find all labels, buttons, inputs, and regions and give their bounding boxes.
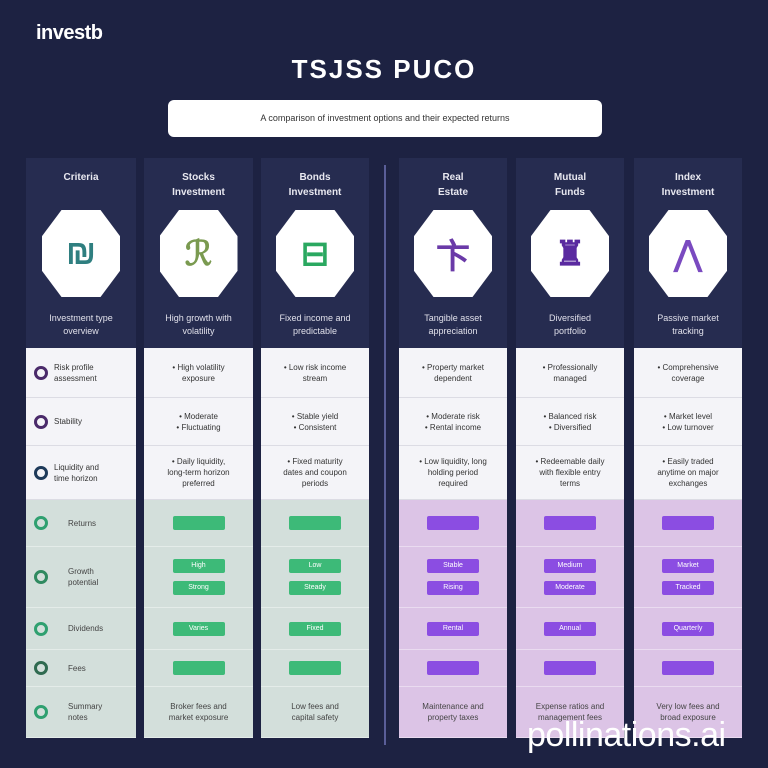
panel: column 5: Annual	[559, 624, 581, 632]
panel: column 4: Tangible asset	[424, 313, 482, 323]
panel: column 2: High growth with	[165, 313, 232, 323]
panel: column 6: coverage	[672, 374, 704, 382]
panel: column 3: Low fees and	[291, 702, 339, 711]
panel: column 2: • Fluctuating	[176, 422, 221, 432]
panel: column 2: High	[191, 562, 206, 569]
panel: column 6: Very low fees and	[656, 702, 720, 711]
panel: column 4: • Rental income	[425, 422, 481, 432]
panel: column 2: long-term horizon	[167, 468, 230, 477]
panel: column 1 labels: Dividends	[68, 624, 103, 633]
panel: column 3: Low	[309, 562, 321, 569]
panel: column 2: preferred	[182, 479, 215, 488]
logo: investb	[36, 22, 103, 44]
panel: column 3: Bonds	[299, 172, 331, 183]
panel: column 3: Investment	[289, 187, 341, 198]
subtitle box: A comparison of investment options and their expected returns	[260, 113, 510, 123]
panel: column 5: Moderate	[555, 584, 585, 591]
panel: column 6: Market	[677, 562, 699, 569]
panel: column 6: exchanges	[669, 479, 707, 488]
panel: column 1 labels	[26, 158, 136, 738]
panel: column 3: Fixed	[306, 624, 324, 632]
icon	[160, 210, 238, 297]
panel: column 3: • Low risk income	[284, 362, 346, 372]
panel: column 3: Steady	[304, 584, 326, 591]
panel: column 5: • Balanced risk	[543, 412, 597, 420]
panel: column 3: predictable	[293, 326, 337, 336]
panel: column 2: Stocks	[182, 172, 215, 183]
panel: column 2: Varies	[189, 624, 208, 632]
icon: ⋀	[674, 234, 702, 272]
panel: column 5: Mutual	[554, 172, 586, 183]
panel: column 4	[399, 158, 507, 738]
panel: column 5: Medium	[558, 562, 582, 569]
icon	[276, 210, 354, 297]
panel: column 1 labels: time horizon	[54, 474, 98, 482]
panel: column 6: • Comprehensive	[657, 362, 719, 372]
title: TSJSS PUCO	[292, 54, 476, 84]
panel: column 5: Expense ratios and	[536, 702, 604, 711]
icon: ♜	[555, 234, 585, 272]
panel: column 2: Investment	[172, 187, 225, 198]
panel: column 5	[516, 158, 624, 738]
panel: column 2: exposure	[182, 374, 215, 382]
panel: column 3: stream	[303, 374, 327, 382]
panel: column 1 labels: assessment	[54, 374, 97, 382]
panel: column 5: terms	[560, 479, 580, 488]
panel: column 2: Broker fees and	[170, 702, 227, 711]
panel: column 1 labels: Investment type	[49, 313, 113, 323]
panel: column 3: • Consistent	[294, 422, 336, 432]
panel: column 1 labels: Fees	[68, 664, 86, 672]
panel: column 3: periods	[302, 479, 328, 488]
icon: ₪	[66, 234, 96, 272]
panel: column 2: volatility	[182, 326, 214, 336]
panel: column 1 labels: overview	[63, 326, 99, 336]
panel: column 3: • Stable yield	[292, 412, 338, 420]
panel: column 3: dates and coupon	[283, 468, 347, 477]
panel: column 5: Diversified	[549, 313, 591, 323]
panel: column 4: Rental	[443, 624, 463, 632]
panel: column 6: Index	[675, 172, 701, 183]
panel: column 6: Passive market	[657, 313, 719, 323]
panel: column 4: • Low liquidity, long	[419, 457, 487, 466]
panel: column 6: • Easily traded	[662, 457, 714, 466]
panel: column 2: • High volatility	[172, 362, 225, 372]
panel: column 2: • Moderate	[179, 412, 218, 420]
panel: column 6: broad exposure	[660, 713, 716, 722]
panel: column 4: Rising	[443, 584, 463, 591]
panel: column 2: Strong	[188, 584, 209, 591]
panel: column 4: property taxes	[428, 713, 478, 722]
panel: column 1 labels: potential	[68, 578, 98, 587]
icon	[531, 210, 609, 297]
panel: column 1 labels: Returns	[68, 518, 96, 528]
panel: column 4: • Property market	[422, 362, 484, 372]
icon	[414, 210, 492, 297]
icon	[42, 210, 120, 297]
panel: column 1 labels: Growth	[68, 567, 94, 576]
icon: ⊟	[301, 234, 329, 272]
panel: column 6: • Market level	[664, 412, 712, 420]
subtitle box	[168, 100, 602, 137]
panel: column 4: • Moderate risk	[426, 412, 480, 420]
panel: column 6: Quarterly	[674, 624, 702, 632]
panel: column 6: • Low turnover	[662, 422, 714, 432]
panel: column 4: Maintenance and	[422, 702, 484, 711]
panel: column 5: • Redeemable daily	[535, 457, 605, 466]
panel: column 1 labels: notes	[68, 713, 88, 722]
panel: column 2: • Daily liquidity,	[172, 457, 225, 466]
panel: column 5: • Professionally	[543, 362, 597, 372]
panel: column 5: management fees	[538, 713, 602, 722]
icon: 卞	[436, 238, 470, 276]
panel: column 4: Stable	[443, 562, 463, 569]
panel: column 6: Tracked	[675, 584, 701, 591]
panel: column 1 labels: Liquidity and	[54, 462, 99, 472]
panel: column 5: with flexible entry	[539, 468, 601, 477]
panel: column 6: anytime on major	[657, 468, 719, 477]
panel: column 1 labels: Criteria	[63, 172, 98, 183]
panel: column 1 labels: Risk profile	[54, 362, 94, 372]
panel: column 3	[261, 158, 369, 738]
panel: column 4: required	[438, 479, 468, 488]
panel: column 1 labels: Stability	[54, 417, 82, 426]
panel: column 5: portfolio	[554, 326, 586, 336]
panel: column 5: managed	[553, 374, 587, 382]
panel: column 6: tracking	[672, 326, 704, 336]
panel: column 2: market exposure	[169, 713, 228, 722]
icon: ℛ	[185, 234, 212, 272]
divider	[384, 165, 386, 745]
panel: column 4: holding period	[428, 468, 478, 477]
panel: column 3: • Fixed maturity	[287, 457, 343, 466]
panel: column 4: Real	[442, 172, 464, 183]
panel: column 2	[144, 158, 253, 738]
panel: column 1 labels: Summary	[68, 702, 102, 711]
panel: column 3: capital safety	[292, 713, 338, 722]
icon	[649, 210, 727, 297]
panel: column 6: Investment	[662, 187, 714, 198]
panel: column 4: dependent	[434, 374, 472, 382]
panel: column 4: appreciation	[428, 326, 478, 336]
panel: column 6	[634, 158, 742, 738]
panel: column 4: Estate	[438, 187, 468, 198]
panel: column 3: Fixed income and	[279, 313, 351, 323]
watermark: pollinations.ai	[527, 716, 726, 754]
panel: column 5: Funds	[555, 187, 585, 198]
panel: column 5: • Diversified	[549, 422, 591, 432]
